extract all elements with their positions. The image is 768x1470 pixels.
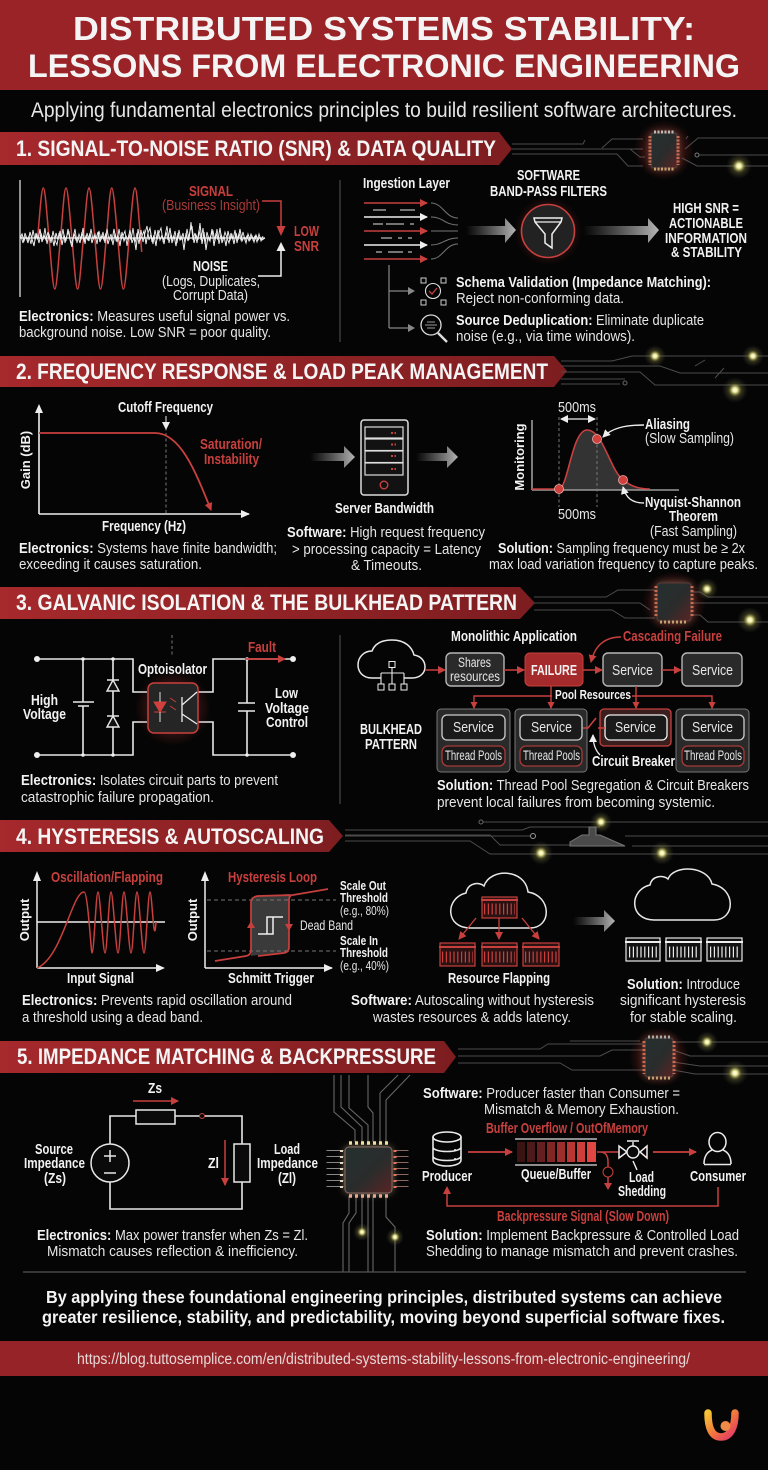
panel divider: [339, 180, 341, 342]
text: software mismatch: [423, 1085, 680, 1118]
text: solution backpressure: [426, 1227, 739, 1260]
icon: funnel filter: [514, 197, 582, 265]
callout: aliasing: (Slow Sampling): [645, 430, 734, 447]
ingestion layer heading: Ingestion Layer: [363, 175, 450, 192]
icon: source deduplication: [421, 315, 447, 342]
chart: gain vs frequency: Saturation/: [200, 436, 263, 453]
title banner: LESSONS FROM ELECTRONIC ENGINEERING: [28, 48, 740, 84]
arrow: to stable scaling: [573, 910, 615, 932]
closing statement: [42, 1287, 725, 1327]
circuit: optoisolator: Voltage: [23, 706, 66, 723]
text: electronics impedance: [37, 1227, 308, 1260]
text: software latency: Software: High request frequency: [287, 524, 485, 541]
chart: sampling curve: Monitoring: [512, 423, 527, 491]
section 1 header: 1. SIGNAL-TO-NOISE RATIO (SNR) & DATA QUALITY: [16, 136, 496, 161]
chart: hysteresis loop: Schmitt Trigger: [228, 970, 314, 987]
high SNR result: HIGH SNR =: [673, 200, 739, 217]
noise label: Corrupt Data): [173, 287, 248, 304]
footer divider: [23, 1271, 746, 1273]
noise label: (Logs, Duplicates,: [162, 273, 260, 290]
circuit: optoisolator: Low: [275, 685, 298, 702]
text: source deduplication: [456, 312, 704, 345]
signal label: [162, 183, 260, 214]
load shedding: Load: [629, 1169, 654, 1186]
panel: ingestion and filtering: [363, 167, 747, 345]
chart: hysteresis loop: Scale In: [340, 933, 378, 948]
text: electronics bandwidth: [19, 540, 277, 573]
chart: gain vs frequency: Cutoff Frequency: [118, 399, 213, 416]
text: software latency: [287, 524, 485, 574]
text: software mismatch: Mismatch & Memory Exhaustion.: [484, 1101, 679, 1118]
bulkhead compartments: Service: [692, 719, 733, 736]
section 5 header: [0, 1041, 456, 1073]
section 4 header: 4. HYSTERESIS & AUTOSCALING: [16, 824, 324, 849]
text: software flapping: [351, 992, 594, 1026]
pool resources distribution: Pool Resources: [555, 688, 631, 702]
panel: stable scaling: [620, 869, 746, 1026]
section 2 header: 2. FREQUENCY RESPONSE & LOAD PEAK MANAGEMENT: [16, 359, 548, 384]
arrow: out of server: [416, 446, 458, 468]
text: electronics hysteresis: [22, 992, 292, 1026]
circuit: source and load: Impedance: [257, 1155, 318, 1172]
text: solution sampling: [489, 540, 758, 573]
title banner: DISTRIBUTED SYSTEMS STABILITY:: [73, 10, 695, 47]
cascading failure callout: [591, 628, 722, 662]
chart: gain vs frequency: Gain (dB): [18, 431, 33, 489]
circuit: source and load: Zl: [208, 1155, 219, 1172]
panel: resource flapping: [351, 873, 594, 1026]
circuit: optoisolator: High: [31, 692, 58, 709]
low SNR label: [294, 223, 320, 255]
chart: hysteresis loop: Hysteresis Loop: [228, 869, 317, 886]
chart: oscillation: Input Signal: [67, 970, 134, 987]
circuit: optoisolator: [23, 635, 309, 758]
text: electronics isolation: [21, 772, 279, 806]
arrow: noise to low SNR: [258, 242, 286, 276]
icon: cloud with stable containers: [625, 869, 743, 961]
chart: oscillation: [17, 869, 165, 987]
high SNR result: ACTIONABLE: [669, 215, 743, 232]
chart: hysteresis loop: Output: [185, 898, 200, 941]
chart: hysteresis loop: (e.g., 80%): [340, 903, 389, 918]
server bandwidth label: Server Bandwidth: [335, 500, 434, 517]
text: solution bulkhead: prevent local failures from becoming systemic.: [437, 794, 715, 811]
band-pass filters label: BAND-PASS FILTERS: [490, 183, 607, 200]
text: solution hysteresis: Solution: Introduce: [627, 976, 740, 993]
bulkhead compartments: Thread Pools: [523, 748, 580, 763]
text: schema validation: Schema Validation (Impedance Matching):: [456, 274, 711, 291]
callout: aliasing: Aliasing: [645, 416, 690, 433]
section 3 header: 3. GALVANIC ISOLATION & THE BULKHEAD PATTERN: [16, 590, 517, 615]
circuit: source and load: (Zs): [44, 1170, 66, 1187]
text: electronics hysteresis: Electronics: Prevents rapid oscillation around: [22, 992, 292, 1009]
chart: oscillation: Oscillation/Flapping: [51, 869, 163, 886]
signal label: (Business Insight): [162, 197, 260, 214]
panel divider: [339, 635, 341, 804]
text: electronics bandwidth: exceeding it causes saturation.: [19, 556, 202, 573]
bracket connector: [389, 265, 413, 328]
circuit: source and load: (Zl): [278, 1170, 296, 1187]
text: software flapping: Software: Autoscaling without hysteresis: [351, 992, 594, 1009]
queue buffer: [515, 1139, 597, 1183]
signal label: SIGNAL: [189, 183, 233, 200]
high SNR result: [665, 200, 747, 261]
callout: Nyquist-Shannon: [623, 487, 741, 540]
callout: aliasing: [603, 416, 734, 447]
high SNR result: INFORMATION: [665, 230, 747, 247]
text: electronics isolation: Electronics: Isolates circuit parts to prevent: [21, 772, 279, 789]
icon: consumer: Consumer: [690, 1168, 746, 1185]
text: software flapping: wastes resources & adds latency.: [372, 1009, 571, 1026]
text: software latency: & Timeouts.: [351, 557, 422, 574]
URL band: [0, 1341, 768, 1376]
circuit: source and load: Impedance: [24, 1155, 85, 1172]
chart: noisy waveform: [20, 180, 265, 297]
panel: signal and noise: [19, 180, 320, 341]
low SNR label: SNR: [294, 238, 319, 255]
arrow: to filter: [466, 218, 516, 243]
icon: cloud network: [358, 640, 425, 690]
noise label: NOISE: [193, 258, 228, 275]
chart: sampling curve: 500ms: [558, 399, 596, 416]
chart: hysteresis loop: (e.g., 40%): [340, 958, 389, 973]
chart: gain vs frequency: Frequency (Hz): [102, 518, 186, 535]
bulkhead compartments: [437, 709, 749, 772]
text: electronics impedance: Electronics: Max power transfer when Zs = Zl.: [37, 1227, 308, 1244]
band-pass filters label: SOFTWARE: [517, 167, 580, 184]
central processor chip: [334, 1075, 410, 1272]
panel: galvanic isolation: [21, 635, 309, 806]
high SNR result: & STABILITY: [671, 244, 742, 261]
band-pass filters label: [490, 167, 607, 200]
text: solution backpressure: Shedding to manage mismatch and prevent crashes.: [426, 1243, 738, 1260]
chart: gain vs frequency: Instability: [204, 451, 260, 468]
text: electronics SNR: Electronics: Measures useful signal power vs.: [19, 308, 290, 325]
text: electronics isolation: catastrophic failure propagation.: [21, 789, 214, 806]
section 5 header: 5. IMPEDANCE MATCHING & BACKPRESSURE: [17, 1044, 436, 1069]
icon: producer database: Producer: [422, 1168, 472, 1185]
arrow: into server: [310, 446, 355, 468]
bulkhead compartments: Service: [531, 719, 572, 736]
low SNR label: LOW: [294, 223, 320, 240]
chart: sampling curve: [512, 399, 679, 523]
monolithic application label: Monolithic Application: [451, 628, 577, 645]
monolithic service row: FAILURE: [531, 662, 577, 679]
bulkhead label: BULKHEAD: [360, 721, 422, 738]
panel: backpressure: [422, 1085, 746, 1260]
title banner: [0, 0, 768, 90]
backpressure signal: [443, 1186, 718, 1225]
icon: server: [361, 420, 408, 495]
text: solution hysteresis: [620, 976, 746, 1026]
text: schema validation: [456, 274, 711, 307]
text: electronics hysteresis: a threshold using a dead band.: [22, 1009, 203, 1026]
text: electronics impedance: Mismatch causes reflection & inefficiency.: [47, 1243, 298, 1260]
chart: hysteresis loop: Dead Band: [300, 917, 353, 933]
chart: oscillation: Output: [17, 898, 32, 941]
circuit: optoisolator: Optoisolator: [138, 661, 207, 678]
pool resources distribution: [470, 686, 716, 709]
circuit: source and load: Load: [274, 1141, 300, 1158]
text: schema validation: Reject non-conforming data.: [456, 290, 624, 307]
text: source deduplication: Source Deduplication: Eliminate duplicate: [456, 312, 704, 329]
queue buffer: Queue/Buffer: [521, 1166, 591, 1183]
panel: hysteresis electronics: [17, 869, 389, 1026]
arrow: valve to consumer: [653, 1151, 696, 1153]
bulkhead compartments: Thread Pools: [445, 748, 502, 763]
chart: hysteresis loop: Scale Out: [340, 878, 387, 893]
text: solution bulkhead: [437, 777, 749, 811]
icon: cloud with containers: [439, 873, 560, 966]
panel: monitoring: [489, 399, 758, 573]
closing statement: By applying these foundational engineering principles, distributed systems can achieve: [46, 1287, 722, 1307]
callout: Nyquist-Shannon: (Fast Sampling): [650, 523, 737, 540]
panel: bulkhead pattern: [358, 628, 749, 811]
load shedding: [597, 1141, 666, 1200]
text: electronics SNR: [19, 308, 290, 341]
monolithic service row: Service: [692, 662, 733, 679]
circuit: source and load: [24, 1080, 318, 1209]
bulkhead compartments: Thread Pools: [684, 748, 742, 763]
load shedding: Shedding: [618, 1183, 666, 1200]
monolithic service row: [425, 653, 742, 686]
circuit breaker: Circuit Breaker: [592, 753, 675, 770]
circuit traces: section 2: [561, 345, 768, 403]
bracket arrowheads: [408, 287, 415, 332]
chart: sampling curve: 500ms: [558, 506, 596, 523]
icon: producer database: [422, 1132, 472, 1185]
circuit traces: section 3: [534, 571, 768, 635]
text: electronics SNR: background noise. Low SNR = poor quality.: [19, 324, 271, 341]
section 1 header: [0, 132, 512, 165]
icon: logo: [708, 1413, 735, 1437]
bulkhead compartments: Service: [615, 719, 656, 736]
circuit traces: section 4: [345, 811, 768, 865]
text: source deduplication: noise (e.g., via time windows).: [456, 328, 635, 345]
text: software latency: > processing capacity = Latency: [292, 541, 481, 558]
panel: frequency response: [18, 399, 277, 573]
circuit traces: section 5: [458, 1027, 768, 1087]
bulkhead compartments: Service: [453, 719, 494, 736]
arrow: producer to queue: [468, 1151, 512, 1153]
bulkhead label: [360, 721, 422, 753]
circuit traces: section 1: [512, 120, 768, 180]
chart: gain vs frequency: [18, 399, 263, 535]
callout: Nyquist-Shannon: Theorem: [669, 508, 718, 525]
text: solution hysteresis: significant hysteresis: [620, 992, 746, 1009]
URL band: https://blog.tuttosemplice.com/en/distributed-systems-stability-lessons-from-electronic-engineering/: [77, 1351, 691, 1368]
resource flapping label: Resource Flapping: [448, 970, 550, 987]
text: electronics bandwidth: Electronics: Systems have finite bandwidth;: [19, 540, 277, 557]
monolithic service row: Shares: [458, 655, 491, 670]
chart: hysteresis loop: Threshold: [340, 945, 388, 960]
text: solution hysteresis: for stable scaling.: [630, 1009, 737, 1026]
icon: consumer: [690, 1132, 746, 1185]
arrow: to result: [583, 218, 659, 243]
backpressure signal: Backpressure Signal (Slow Down): [497, 1208, 669, 1225]
circuit: optoisolator: Fault: [248, 639, 276, 656]
circuit: source and load: Source: [35, 1141, 73, 1158]
callout: Nyquist-Shannon: Nyquist-Shannon: [645, 494, 741, 511]
icon: schema validation: [421, 278, 446, 305]
overflow label: Buffer Overflow / OutOfMemory: [486, 1120, 648, 1137]
panel: impedance circuit: [24, 1080, 318, 1260]
text: solution backpressure: Solution: Implement Backpressure & Controlled Load: [426, 1227, 739, 1244]
monolithic service row: Service: [612, 662, 653, 679]
circuit: source and load: Zs: [148, 1080, 162, 1097]
circuit breaker: [583, 718, 675, 770]
panel: server bandwidth: [287, 420, 485, 574]
arrow: signal to low SNR: [262, 201, 286, 236]
monolithic service row: resources: [450, 669, 500, 684]
chart: hysteresis loop: [185, 869, 389, 987]
ingestion arrows: [364, 203, 458, 259]
cascading failure callout: Cascading Failure: [623, 628, 722, 645]
circuit: optoisolator: Control: [266, 714, 308, 731]
chart: hysteresis loop: Threshold: [340, 890, 388, 905]
noise label: [162, 258, 260, 304]
closing statement: greater resilience, stability, and predictability, moving beyond superficial software fixes.: [42, 1307, 725, 1327]
text: software mismatch: Software: Producer faster than Consumer =: [423, 1085, 680, 1102]
circuit: optoisolator: Voltage: [265, 700, 309, 717]
bulkhead label: PATTERN: [365, 736, 417, 753]
